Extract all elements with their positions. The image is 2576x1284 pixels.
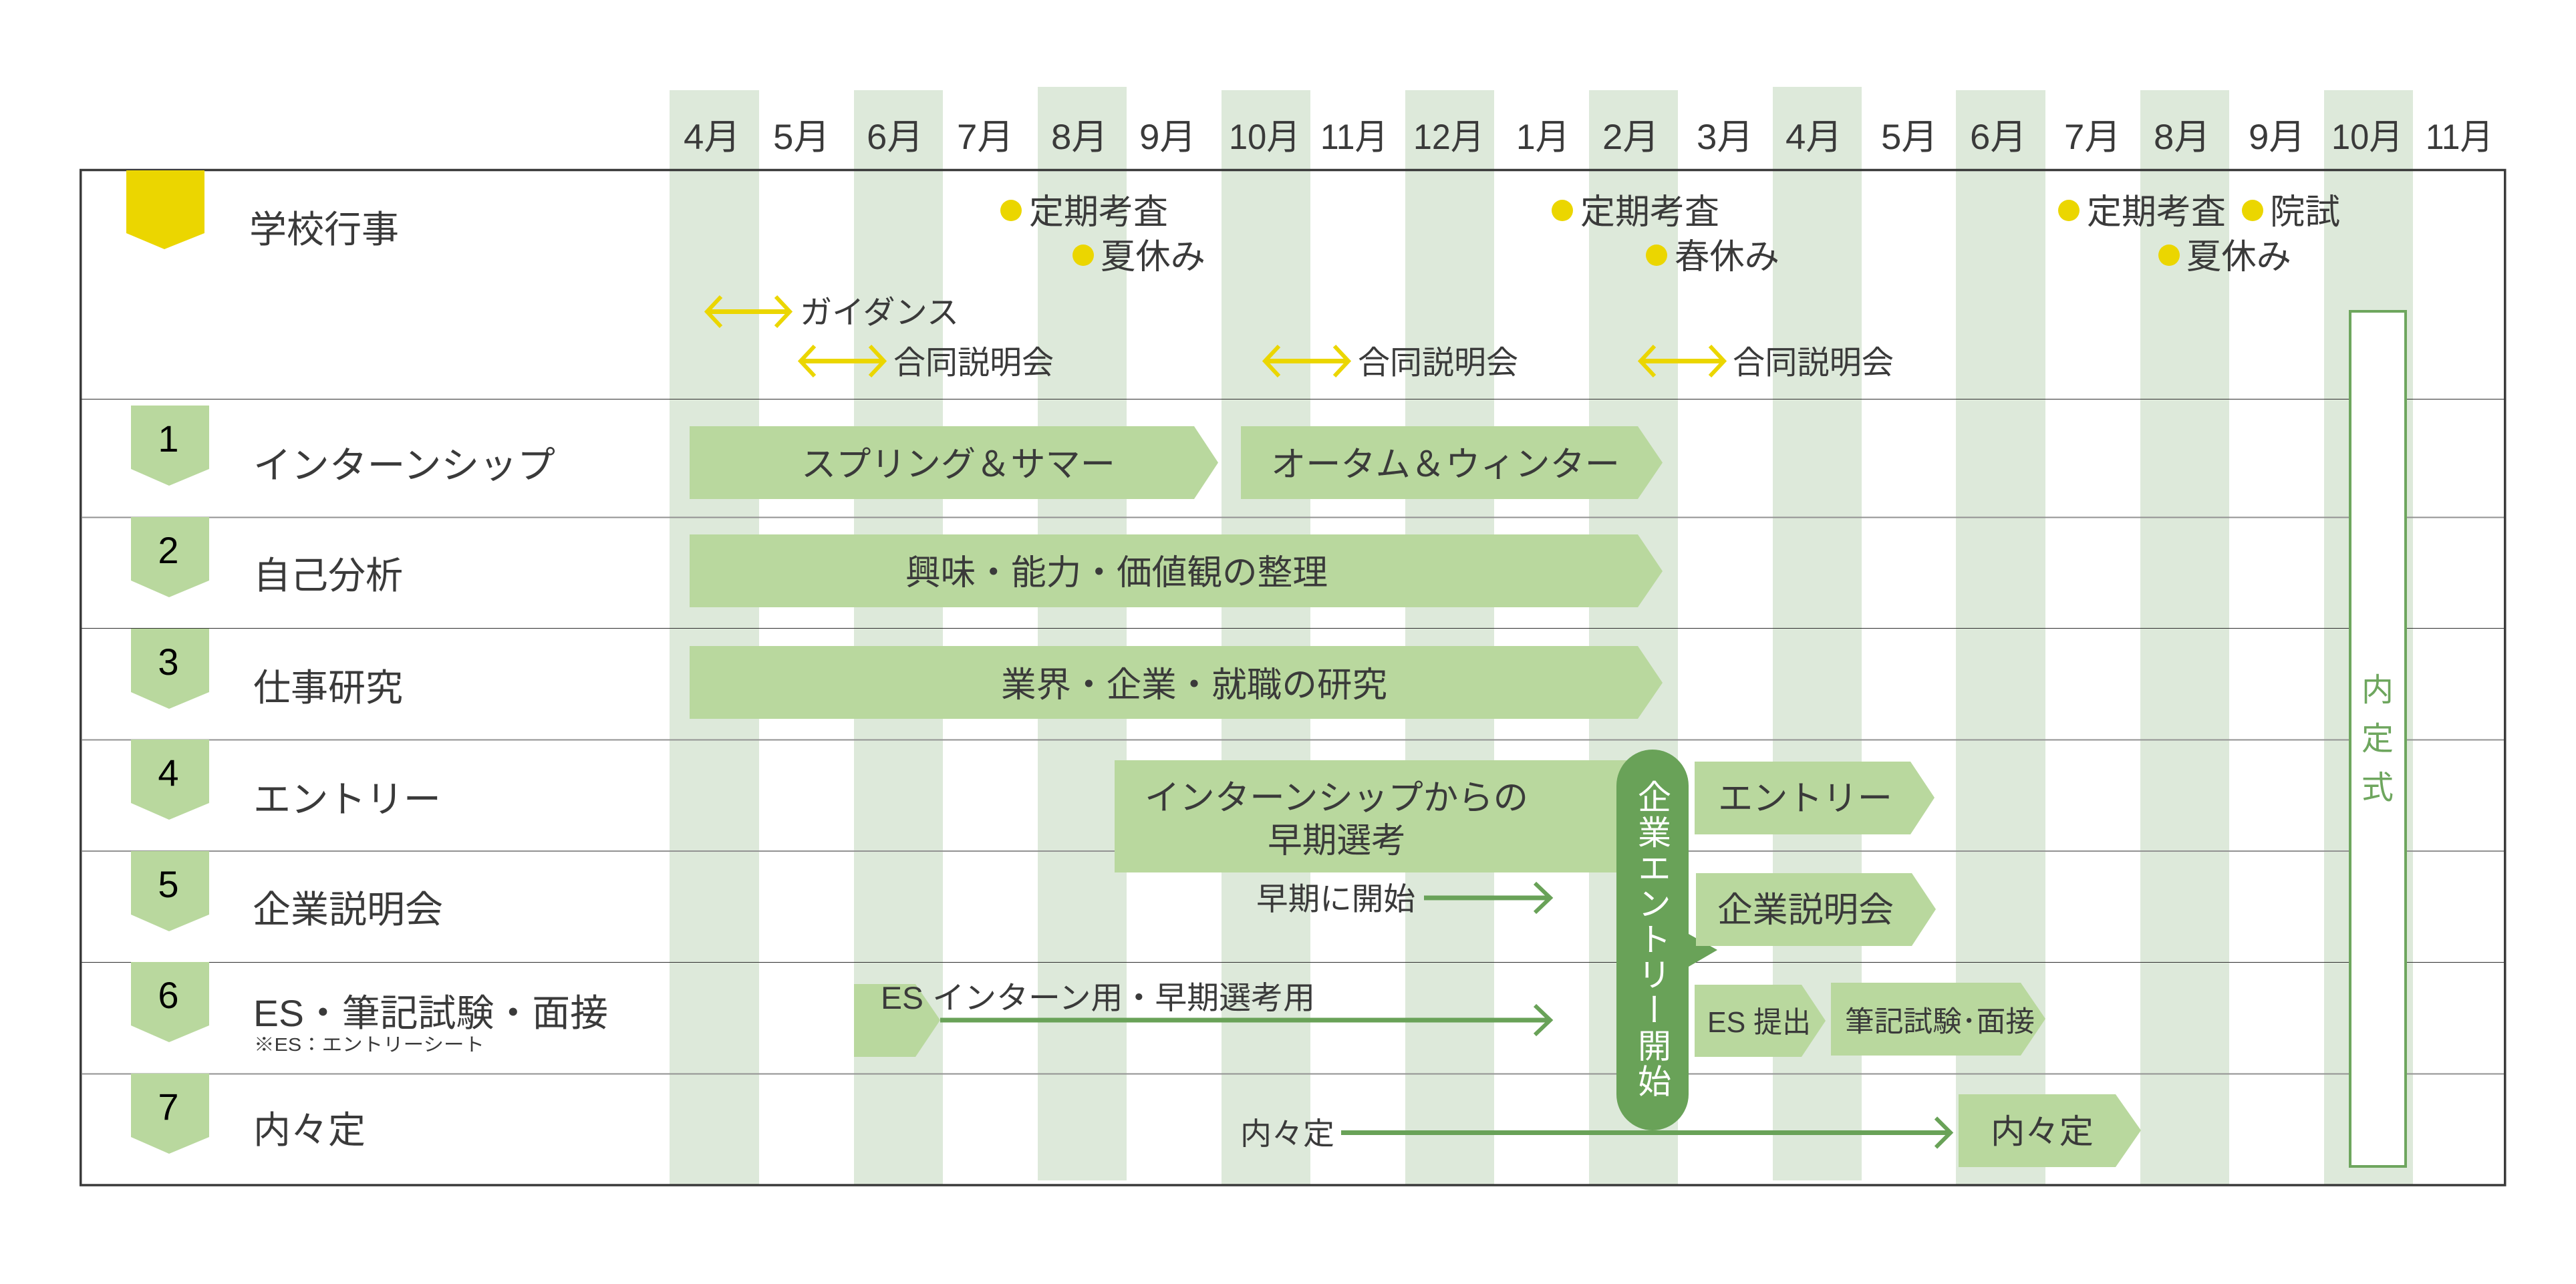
pill: company entry start: [1616, 750, 1717, 1130]
box text: 内: [2362, 673, 2394, 708]
school events: term exams and holidays: 夏休み: [1101, 238, 1205, 277]
tag 1: [131, 406, 209, 486]
box text: [2362, 673, 2394, 806]
pill text: 企業エントリー開始: [1633, 780, 1671, 1100]
month header labels: [684, 118, 2493, 157]
month header labels: 8月: [2154, 118, 2210, 157]
tag 4: [131, 740, 209, 820]
school events: term exams and holidays: 定期考査: [1580, 193, 1719, 232]
month header labels: 11月: [2426, 118, 2493, 157]
arrow: guidance period: [707, 297, 790, 327]
month column stripes: [670, 87, 2413, 1185]
row label: job research: 仕事研究: [253, 667, 403, 709]
bar: spring and summer: [690, 426, 1218, 499]
bar: industry research: [690, 646, 1663, 719]
bar label: autumn and winter: オータム＆ウィンター: [1271, 446, 1620, 484]
number 4: 4: [158, 752, 179, 794]
tag 7: [131, 1074, 209, 1154]
bar label: informal offer: 内々定: [1991, 1113, 2094, 1150]
bar: informal offer: [1959, 1094, 2141, 1167]
label: joint session 2: 合同説明会: [1358, 345, 1518, 381]
month header labels: 7月: [957, 118, 1014, 157]
tag 3: [131, 629, 209, 709]
number 3: 3: [158, 641, 179, 683]
bar: company briefing: [1696, 873, 1936, 946]
arrow: early start: [1256, 881, 1550, 917]
month header labels: 4月: [684, 118, 740, 157]
bar label: interests and values: 興味・能力・価値観の整理: [905, 554, 1328, 593]
row label: internship: インターンシップ: [253, 444, 555, 486]
label: joint session 3: 合同説明会: [1733, 345, 1894, 381]
month header labels: 10月: [1229, 118, 1300, 157]
row label: company briefing: 企業説明会: [253, 889, 443, 931]
bar label: ES submission: ES 提出: [1707, 1006, 1811, 1039]
heading: school events: 学校行事: [249, 208, 399, 251]
month header labels: 2月: [1602, 118, 1659, 157]
label: ES for internship and early selection: ES インターン用・早期選考用: [881, 980, 1315, 1015]
block text line 2: 早期選考: [1268, 822, 1406, 860]
row 6: ES, written test, interview: [131, 962, 608, 1055]
icon: yellow tag: [126, 170, 204, 249]
row 1: internship: [131, 406, 1663, 499]
month header labels: 8月: [1051, 118, 1108, 157]
month header labels: 9月: [1139, 118, 1196, 157]
school events: term exams and holidays: 院試: [2270, 193, 2340, 232]
box text: 式: [2362, 770, 2394, 806]
arrow: joint session 3: [1640, 346, 1724, 376]
arrow: joint session 1: [801, 346, 884, 376]
bar label: spring and summer: スプリング＆サマー: [801, 446, 1115, 484]
school events: term exams and holidays: 定期考査: [1029, 193, 1168, 232]
label: early start: 早期に開始: [1256, 881, 1415, 917]
month header labels: 11月: [1320, 118, 1388, 157]
school events: term exams and holidays: 春休み: [1675, 238, 1779, 277]
month header labels: 4月: [1785, 118, 1842, 157]
row 4: entry: [131, 740, 441, 820]
month header labels: 7月: [2064, 118, 2121, 157]
row 3: job research: [131, 629, 1663, 719]
tag 2: [131, 517, 209, 597]
number 6: 6: [158, 974, 179, 1016]
row 7: informal offer: [131, 1074, 366, 1154]
school events: term exams and holidays: 定期考査: [2087, 193, 2226, 232]
row 2: self analysis: [131, 517, 1663, 607]
month header labels: 6月: [867, 118, 923, 157]
month header labels: 3月: [1697, 118, 1753, 157]
bar: autumn and winter: [1241, 426, 1663, 499]
tag 6: [131, 962, 209, 1042]
tag 5: [131, 851, 209, 931]
number 7: 7: [158, 1086, 179, 1128]
label: guidance: ガイダンス: [800, 295, 959, 331]
row 5: company briefing: [131, 851, 443, 931]
bar label: entry: エントリー: [1718, 780, 1892, 818]
number 5: 5: [158, 863, 179, 905]
row label: self analysis: 自己分析: [253, 554, 403, 597]
bar label: industry research: 業界・企業・就職の研究: [1001, 666, 1387, 705]
month header labels: 5月: [773, 118, 830, 157]
bar: interests and values: [690, 534, 1663, 607]
school events: term exams and holidays: 夏休み: [2186, 238, 2291, 277]
number 1: 1: [158, 418, 179, 460]
school events: term exams and holidays: [1000, 193, 2340, 277]
bar: written test and interview: [1831, 983, 2045, 1056]
number 2: 2: [158, 529, 179, 571]
box text: 定: [2362, 721, 2394, 757]
month header labels: 10月: [2331, 118, 2403, 157]
month header labels: 5月: [1881, 118, 1938, 157]
table frame and row lines: [81, 170, 2505, 1185]
label: informal offer: 内々定: [1240, 1116, 1334, 1151]
bar label: written test and interview: 筆記試験･面接: [1845, 1006, 2035, 1038]
footnote: ES meaning: ※ES：エントリーシート: [254, 1034, 484, 1055]
month header labels: 12月: [1413, 118, 1484, 157]
bar label: company briefing: 企業説明会: [1717, 891, 1894, 930]
row label: informal offer: 内々定: [253, 1109, 366, 1151]
bar: entry: [1695, 762, 1935, 834]
block text line 1: インターンシップからの: [1145, 779, 1528, 818]
month header labels: 9月: [2249, 118, 2305, 157]
box: offer ceremony: [2350, 311, 2406, 1166]
ES internship tag with arrow: [854, 980, 1550, 1057]
bar: ES submission: [1695, 985, 1826, 1057]
row label: entry: エントリー: [253, 778, 441, 820]
block: early selection from internship: [1115, 760, 1632, 872]
row label: ES, written test, interview: ES・筆記試験・面接: [253, 992, 608, 1034]
row: school events header: [126, 170, 399, 251]
label: joint session 1: 合同説明会: [893, 345, 1054, 381]
arrow: joint session 2: [1265, 346, 1348, 376]
month header labels: 1月: [1516, 118, 1570, 157]
arrow: informal offer timeline: [1240, 1116, 1951, 1151]
month header labels: 6月: [1970, 118, 2027, 157]
